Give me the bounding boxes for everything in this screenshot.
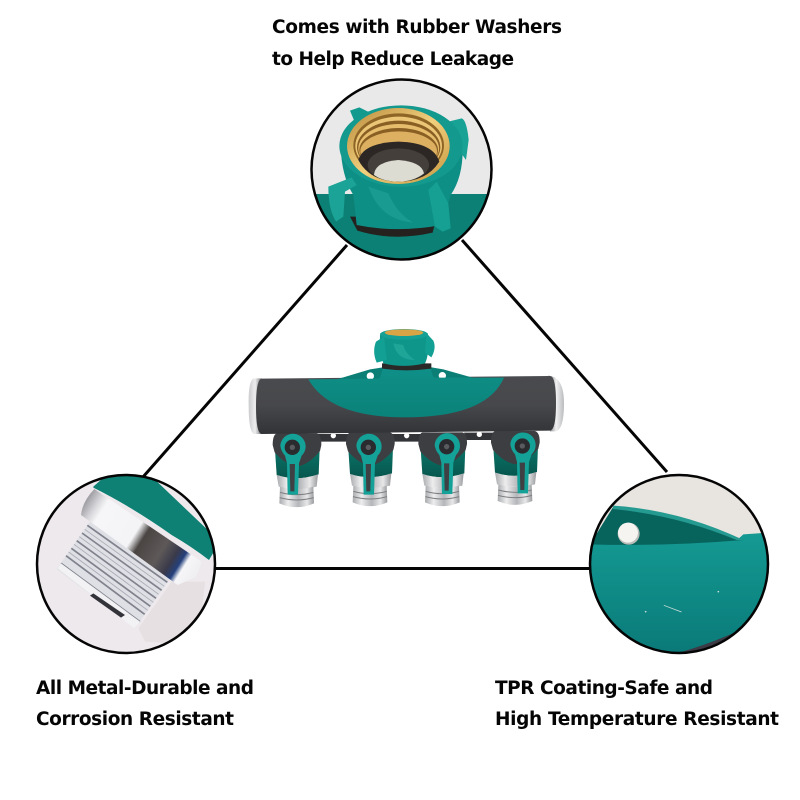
brass rim — [347, 108, 450, 184]
thread tip — [58, 563, 140, 628]
heading: rubber washers: to Help Reduce Leakage — [272, 49, 514, 70]
valves — [273, 431, 540, 507]
caption: TPR coating — [495, 678, 779, 730]
grip: right — [448, 118, 469, 160]
nut top — [339, 105, 463, 187]
main body — [256, 376, 556, 434]
caption: metal durable: All Metal-Durable and — [36, 678, 254, 699]
connecting triangle lines — [143, 240, 667, 568]
photo background — [38, 480, 214, 652]
teal coating — [591, 533, 767, 652]
white core — [374, 160, 424, 182]
web between valves — [317, 433, 496, 442]
valve handles — [280, 432, 536, 495]
brass opening — [385, 329, 423, 336]
teal base — [316, 194, 487, 258]
photo background — [597, 476, 761, 538]
circle: metal thread detail — [32, 472, 222, 658]
product: four-way hose splitter — [249, 329, 564, 507]
heading: rubber washers — [272, 17, 562, 70]
teal fins — [337, 367, 476, 379]
raised fin — [590, 507, 743, 545]
silver end caps — [249, 378, 262, 434]
heading: rubber washers: Comes with Rubber Washers — [272, 17, 562, 38]
grip: front left — [328, 177, 357, 222]
black washer — [382, 363, 431, 370]
inner gasket — [358, 142, 439, 182]
surface specks — [645, 591, 719, 612]
threaded section — [57, 522, 170, 628]
thread lines — [61, 525, 167, 622]
grip: back left — [350, 107, 368, 120]
caption: TPR coating: High Temperature Resistant — [495, 709, 779, 730]
caption: TPR coating: TPR Coating-Safe and — [495, 678, 713, 699]
teal crescent — [308, 367, 504, 417]
fin hole — [618, 523, 640, 545]
teal cover — [93, 473, 220, 560]
grip: front right — [428, 182, 451, 232]
chrome collar — [81, 489, 202, 585]
nut lower body — [341, 147, 463, 229]
caption: metal durable — [36, 678, 254, 730]
soft shadow — [138, 582, 205, 645]
dark body edge — [682, 633, 733, 652]
top nut — [380, 335, 429, 366]
circle: TPR coating detail — [583, 472, 773, 658]
rubber washer — [350, 217, 437, 237]
circle: brass connector detail — [307, 77, 497, 263]
caption: metal durable: Corrosion Resistant — [36, 709, 234, 730]
nut shading — [368, 187, 413, 223]
photo background — [312, 80, 490, 194]
brass threads — [353, 113, 444, 161]
